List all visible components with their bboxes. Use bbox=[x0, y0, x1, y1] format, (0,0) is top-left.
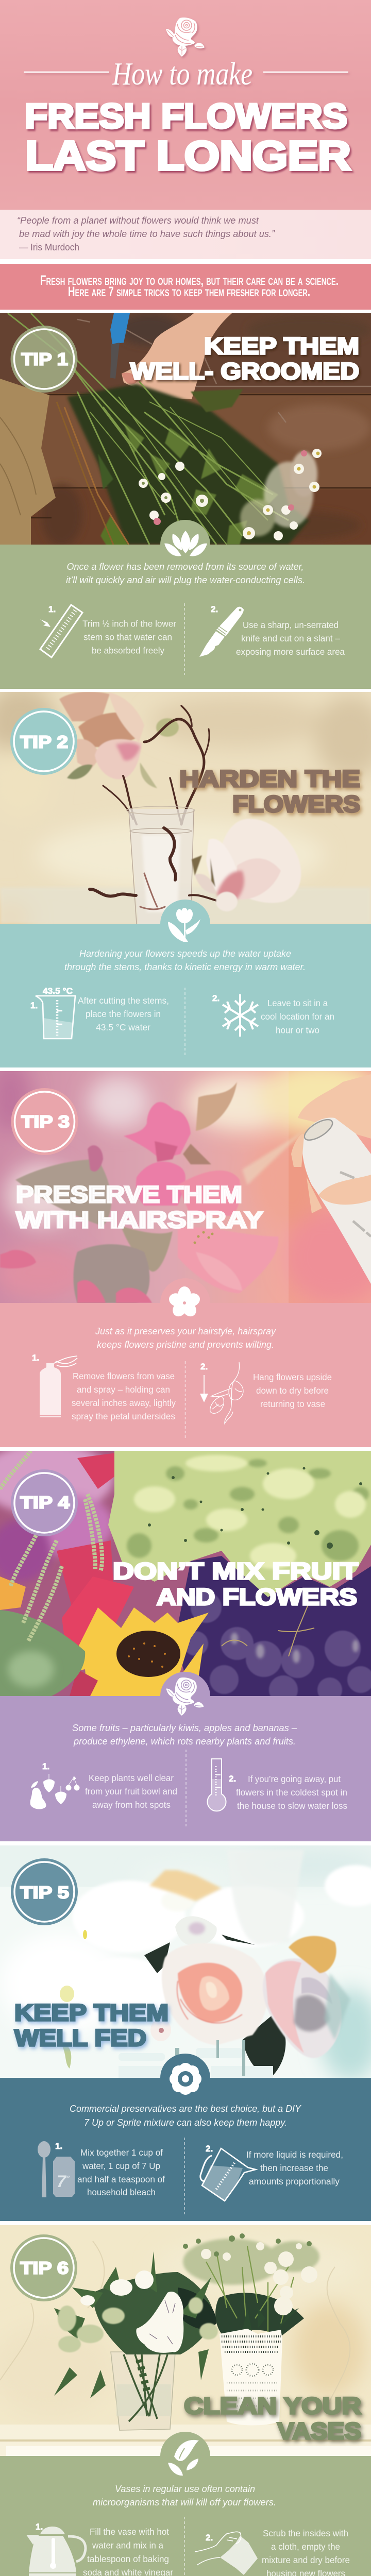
intro band bbox=[0, 264, 371, 310]
step 1: beaker: 43.5 °C bbox=[43, 986, 73, 996]
step 1: fruits: away from hot spots bbox=[92, 1800, 171, 1810]
step 1: fruits bbox=[30, 1761, 177, 1810]
title: how to make bbox=[24, 57, 348, 92]
panel: tip 6 text: Vases in regular use often contain bbox=[115, 2483, 255, 2494]
leaves bbox=[15, 1082, 237, 1303]
step 2: snowflake bbox=[212, 993, 334, 1037]
tip 2 badge bbox=[10, 708, 77, 775]
glass vase bbox=[111, 2352, 175, 2430]
photo: magnolia in glass bbox=[0, 685, 371, 933]
tip 6 badge bbox=[10, 2234, 77, 2301]
tip 3 badge bbox=[11, 1088, 78, 1155]
tip 3 heading: WITH HAIRSPRAY bbox=[16, 1207, 263, 1233]
branches bbox=[103, 706, 209, 824]
step 1: spoon and can bbox=[38, 2141, 165, 2197]
photo: two vases on mantel bbox=[0, 2225, 371, 2456]
panel: tip 5 text bbox=[0, 2054, 371, 2221]
step 2: knife bbox=[199, 604, 345, 657]
tip 2 heading: HARDEN THE bbox=[179, 766, 360, 792]
panel: tip 5 text: Commercial preservatives are the best choice, but a DIY bbox=[70, 2103, 302, 2114]
tip 5 heading bbox=[14, 1999, 168, 2051]
left bouquet bbox=[93, 2272, 214, 2354]
tip 3 heading: PRESERVE THEM bbox=[16, 1181, 242, 1208]
step 1: ruler: 1. bbox=[48, 604, 56, 614]
step 2: cloth and hand: a cloth, empty the bbox=[271, 2541, 340, 2552]
step 2: measuring jug: amounts proportionally bbox=[249, 2176, 340, 2187]
step 2: knife: exposing more surface area bbox=[236, 647, 345, 657]
icon: leaves bbox=[168, 2440, 199, 2476]
lilac rose bbox=[263, 1958, 342, 2058]
step 2: cloth and hand: Scrub the insides with bbox=[263, 2528, 348, 2538]
step 1: beaker: After cutting the stems, bbox=[78, 995, 169, 1006]
tip 3 badge: TIP 3 bbox=[21, 1112, 70, 1131]
step 1: ruler: be absorbed freely bbox=[92, 645, 164, 655]
step 2: cloth and hand: 2. bbox=[206, 2533, 213, 2543]
step 2: snowflake: Leave to sit in a bbox=[267, 998, 328, 1008]
tip 2 heading: FLOWERS bbox=[232, 791, 360, 817]
photo: fruit, lettuce and flowers bbox=[0, 1443, 371, 1704]
step 2: thermometer: flowers in the coldest spot in bbox=[236, 1787, 347, 1798]
panel: tip 3 text bbox=[0, 1278, 371, 1447]
basket bbox=[119, 2048, 273, 2078]
step 1: ruler: stem so that water can bbox=[83, 632, 172, 642]
glass vase bbox=[129, 809, 194, 924]
step 1: spray can: several inches away, lightly bbox=[72, 1398, 176, 1408]
step 2: hanging flower: down to dry before bbox=[256, 1385, 329, 1396]
tip 2 section bbox=[0, 685, 371, 1067]
title: how to make: How to make bbox=[112, 57, 252, 92]
step 1: spray can: and spray – holding can bbox=[77, 1384, 170, 1395]
scissors bbox=[110, 313, 130, 344]
lettuce bbox=[108, 1451, 371, 1597]
panel: tip 2 text bbox=[0, 900, 371, 1067]
lower magnolia bbox=[192, 819, 301, 911]
header panel bbox=[0, 0, 371, 210]
step 2: cloth and hand: mixture and dry before bbox=[262, 2555, 350, 2565]
tip 3 section bbox=[0, 1061, 371, 1447]
pepper bbox=[70, 1669, 98, 1696]
peach rose bbox=[162, 1943, 268, 2045]
greenery mass bbox=[67, 384, 309, 545]
icon: blossom bbox=[167, 1286, 201, 1319]
step 2: snowflake: 2. bbox=[212, 993, 220, 1003]
tip 5 section bbox=[0, 1845, 371, 2221]
icon: tulip bbox=[168, 908, 200, 942]
panel: tip 1 text: it’ll wilt quickly and air will plug the water-conducting cells. bbox=[66, 574, 305, 585]
step 1: spoon and can: water, 1 cup of 7 Up bbox=[82, 2161, 160, 2171]
step 1: beaker: 1. bbox=[30, 1001, 38, 1010]
tip 6 badge: TIP 6 bbox=[20, 2259, 69, 2277]
step 2: hanging flower: 2. bbox=[200, 1362, 208, 1371]
step 1: spoon and can: 7 bbox=[57, 2172, 67, 2191]
step 1: spray can: spray the petal undersides bbox=[72, 1411, 175, 1421]
sunflower bbox=[78, 1607, 209, 1696]
panel: tip 2 text: Hardening your flowers speeds up the water uptake bbox=[79, 948, 291, 959]
tip 1 badge bbox=[10, 326, 77, 393]
tip 4 heading: AND FLOWERS bbox=[157, 1584, 357, 1610]
tip 4 heading bbox=[113, 1558, 358, 1610]
step 2: knife: knife and cut on a slant – bbox=[241, 633, 340, 643]
step 1: ruler bbox=[40, 604, 176, 657]
tip 1 heading: WELL- GROOMED bbox=[130, 358, 359, 384]
photo: white and peach roses bbox=[0, 1845, 371, 2081]
panel: tip 3 text: Just as it preserves your hairstyle, hairspray bbox=[95, 1326, 277, 1336]
lace vase bbox=[220, 2329, 282, 2426]
step 2: measuring jug: then increase the bbox=[260, 2163, 328, 2173]
step 2: snowflake: hour or two bbox=[276, 1025, 319, 1036]
icon: lotus bbox=[164, 531, 207, 556]
icon: rose bbox=[166, 18, 205, 57]
hand bbox=[122, 313, 232, 399]
step 1: kettle bbox=[26, 2522, 173, 2576]
right bouquet bbox=[215, 2293, 304, 2336]
step 2: knife: 2. bbox=[211, 604, 218, 614]
step 1: spray can: Remove flowers from vase bbox=[73, 1371, 175, 1381]
step 2: measuring jug: If more liquid is required, bbox=[246, 2149, 343, 2160]
panel: tip 2 text: through the stems, thanks to kinetic energy in warm water. bbox=[64, 961, 306, 972]
flower spikes bbox=[0, 1451, 102, 1641]
tip 6 heading bbox=[184, 2393, 361, 2444]
tip 1 heading: KEEP THEM bbox=[204, 333, 359, 359]
tip 4 section bbox=[0, 1443, 371, 1841]
step 2: hanging flower: returning to vase bbox=[260, 1399, 325, 1409]
step 1: kettle: water and mix in a bbox=[92, 2540, 163, 2550]
mantel bbox=[0, 2425, 371, 2456]
step 1: kettle: Fill the vase with hot bbox=[90, 2527, 169, 2537]
step 1: kettle: 1. bbox=[36, 2522, 43, 2532]
step 2: hanging flower bbox=[200, 1362, 332, 1423]
panel: tip 4 text bbox=[0, 1672, 371, 1841]
tip 6 section bbox=[0, 2225, 371, 2576]
panel: tip 1 text bbox=[0, 520, 371, 689]
quote panel: be mad with joy the whole time to have such things about us.” bbox=[19, 228, 275, 239]
step 1: beaker: place the flowers in bbox=[86, 1009, 161, 1019]
yellow rose bbox=[289, 1936, 336, 1973]
haze bbox=[0, 1071, 289, 1303]
title: fresh flowers last longer: FRESH FLOWERS bbox=[25, 97, 347, 136]
tip 3 heading bbox=[16, 1181, 263, 1233]
quote panel: “People from a planet without flowers would think we must bbox=[17, 215, 259, 226]
step 2: thermometer bbox=[207, 1759, 347, 1811]
step 1: ruler: Trim ½ inch of the lower bbox=[82, 618, 176, 629]
panel: tip 6 text bbox=[0, 2432, 371, 2576]
step 1: spray can: 1. bbox=[32, 1353, 39, 1363]
step 1: fruits: from your fruit bowl and bbox=[85, 1786, 177, 1797]
step 1: beaker bbox=[30, 986, 169, 1039]
upper magnolia bbox=[59, 692, 179, 788]
tip 5 badge bbox=[11, 1858, 78, 1925]
tip 1 badge: TIP 1 bbox=[21, 349, 68, 369]
step 1: spoon and can: UP bbox=[65, 2176, 70, 2179]
tip 4 badge: TIP 4 bbox=[20, 1493, 70, 1512]
step 1: kettle: tablespoon of baking bbox=[87, 2554, 169, 2564]
tip 5 heading: KEEP THEM bbox=[14, 1999, 168, 2026]
panel: tip 1 text: Once a flower has been removed from its source of water, bbox=[67, 561, 304, 572]
tip 2 heading bbox=[179, 766, 360, 817]
step 2: measuring jug bbox=[200, 2144, 343, 2201]
tip 2 badge: TIP 2 bbox=[20, 733, 68, 751]
panel: tip 4 text: produce ethylene, which rots nearby plants and fruits. bbox=[73, 1736, 296, 1747]
title: fresh flowers last longer bbox=[25, 97, 351, 178]
photo: florist trimming stems on wood table bbox=[0, 313, 371, 556]
step 1: fruits: Keep plants well clear bbox=[89, 1773, 174, 1783]
panel: tip 5 text: 7 Up or Sprite mixture can also keep them happy. bbox=[84, 2117, 287, 2128]
spray can and hand bbox=[242, 1134, 299, 1184]
tip 5 heading: WELL FED bbox=[14, 2025, 146, 2051]
daisies bbox=[240, 451, 317, 536]
tip 4 badge bbox=[11, 1469, 78, 1536]
icon: ring flower bbox=[170, 2063, 201, 2095]
step 1: fruits: 1. bbox=[42, 1761, 49, 1771]
step 1: spoon and can: household bleach bbox=[87, 2187, 156, 2197]
panel: tip 6 text: microorganisms that will kill off your flowers. bbox=[93, 2497, 276, 2507]
quote panel bbox=[0, 210, 371, 259]
tip 1 heading bbox=[130, 333, 359, 384]
tip 1 section bbox=[0, 313, 371, 689]
step 2: cloth and hand bbox=[195, 2528, 350, 2576]
title: fresh flowers last longer: LAST LONGER bbox=[25, 133, 351, 178]
step 1: spray can bbox=[32, 1353, 176, 1421]
step 1: spoon and can: 1. bbox=[55, 2141, 62, 2151]
dark gaps bbox=[144, 1935, 285, 2075]
step 2: knife: Use a sharp, un-serrated bbox=[243, 620, 339, 630]
step 2: snowflake: cool location for an bbox=[261, 1011, 334, 1022]
step 2: measuring jug: 2. bbox=[206, 2144, 213, 2154]
panel: tip 4 text: Some fruits – particularly kiwis, apples and bananas – bbox=[72, 1722, 297, 1733]
step 1: beaker: 43.5 °C water bbox=[96, 1022, 150, 1032]
pink blossoms bbox=[0, 1102, 278, 1303]
grapes bbox=[175, 1556, 371, 1696]
tip 5 badge: TIP 5 bbox=[20, 1883, 69, 1902]
panel: tip 3 text: keeps flowers pristine and prevents wilting. bbox=[97, 1339, 274, 1350]
white rose pale bbox=[227, 1850, 304, 1945]
step 2: hanging flower: Hang flowers upside bbox=[253, 1372, 332, 1382]
step 2: thermometer: the house to slow water loss bbox=[237, 1801, 347, 1811]
quote panel: — Iris Murdoch bbox=[19, 242, 79, 252]
step 1: spoon and can: Mix together 1 cup of bbox=[80, 2147, 163, 2158]
step 2: thermometer: If you’re going away, put bbox=[248, 1774, 341, 1784]
step 2: thermometer: 2. bbox=[229, 1774, 236, 1784]
tip 6 heading: CLEAN YOUR bbox=[184, 2393, 361, 2419]
photo: blossom and hairspray bbox=[0, 1061, 371, 1303]
burlap cloth bbox=[0, 379, 56, 545]
tip 6 heading: VASES bbox=[277, 2418, 361, 2444]
tip 4 heading: DON’T MIX FRUIT bbox=[113, 1558, 358, 1584]
step 1: spoon and can: and half a teaspoon of bbox=[77, 2174, 165, 2184]
icon: rose bbox=[166, 1677, 204, 1716]
